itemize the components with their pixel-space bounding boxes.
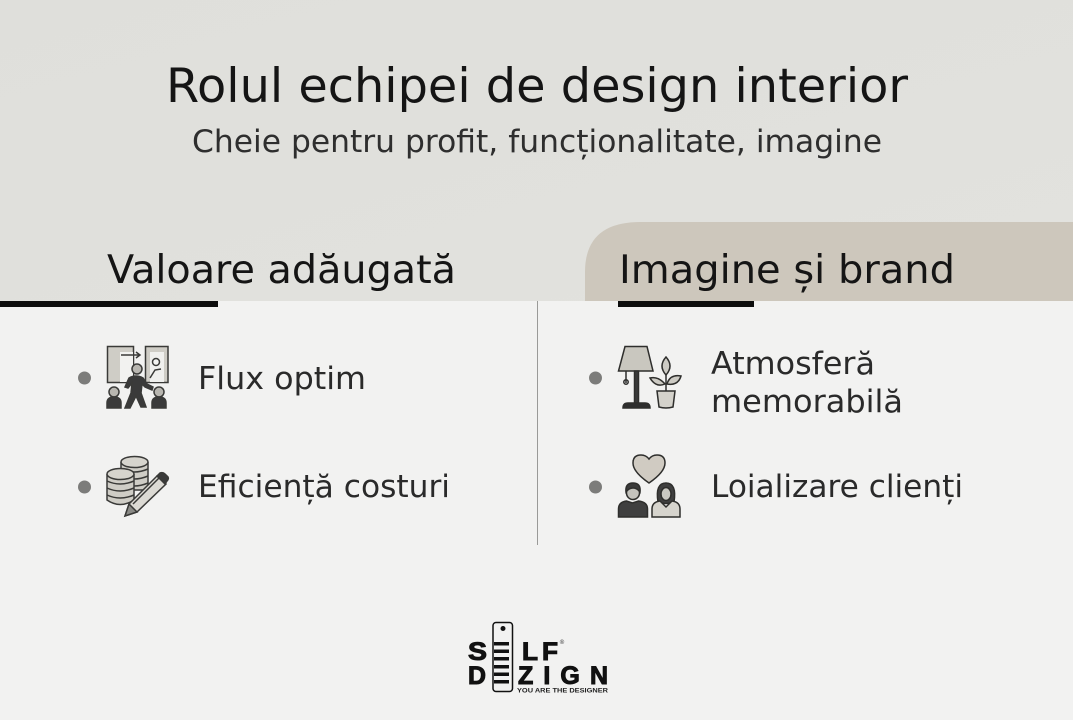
- heading: Imagine și brand: Imagine și brand: [619, 248, 955, 293]
- subtitle: Cheie pentru profit, funcționalitate, imagine: [192, 124, 882, 160]
- icon: coins and pencil: [107, 456, 168, 516]
- logo letter L: L: [522, 638, 538, 666]
- heading underline: left: [0, 301, 218, 307]
- list item: Atmosferă memorabilă: [589, 346, 903, 420]
- logo letter E bottom: [494, 665, 509, 684]
- bullet: [589, 372, 602, 384]
- title: Rolul echipei de design interior: [166, 59, 909, 114]
- logo ruler hole: [500, 626, 506, 631]
- bullet: [78, 480, 91, 494]
- logo letters ZIGN: ZIGN: [518, 662, 608, 690]
- heading: Valoare adăugată: Valoare adăugată: [107, 248, 456, 293]
- logo: Self Dezign: [468, 622, 609, 694]
- list item: Loializare clienți: [589, 455, 963, 517]
- list item: Eficiență costuri: [78, 456, 450, 516]
- logo letter S: S: [468, 638, 487, 666]
- logo letter F: F: [542, 638, 558, 666]
- logo ruler outline: [493, 622, 512, 692]
- logo tagline: YOU ARE THE DESIGNER: [517, 688, 609, 694]
- logo registered mark: ®: [559, 639, 565, 646]
- logo letter E top: [494, 642, 509, 660]
- label: Eficiență costuri: [198, 469, 450, 505]
- label: Loializare clienți: [711, 469, 963, 505]
- icon: lamp and plant: [618, 346, 681, 408]
- panel: right tab background: [585, 222, 1073, 301]
- heading underline: right: [618, 301, 754, 307]
- list item: Flux optim: [78, 346, 366, 408]
- bullet: [589, 480, 602, 494]
- bullet: [78, 372, 91, 384]
- label: [711, 346, 903, 420]
- label line 1: Atmosferă: [711, 346, 875, 382]
- icon: couple with heart: [618, 455, 680, 517]
- label: Flux optim: [198, 361, 366, 397]
- icon: flow through doors with people: [107, 346, 168, 408]
- label line 2: memorabilă: [711, 384, 903, 420]
- background: header band: [0, 0, 1073, 301]
- logo letter D: D: [468, 662, 486, 690]
